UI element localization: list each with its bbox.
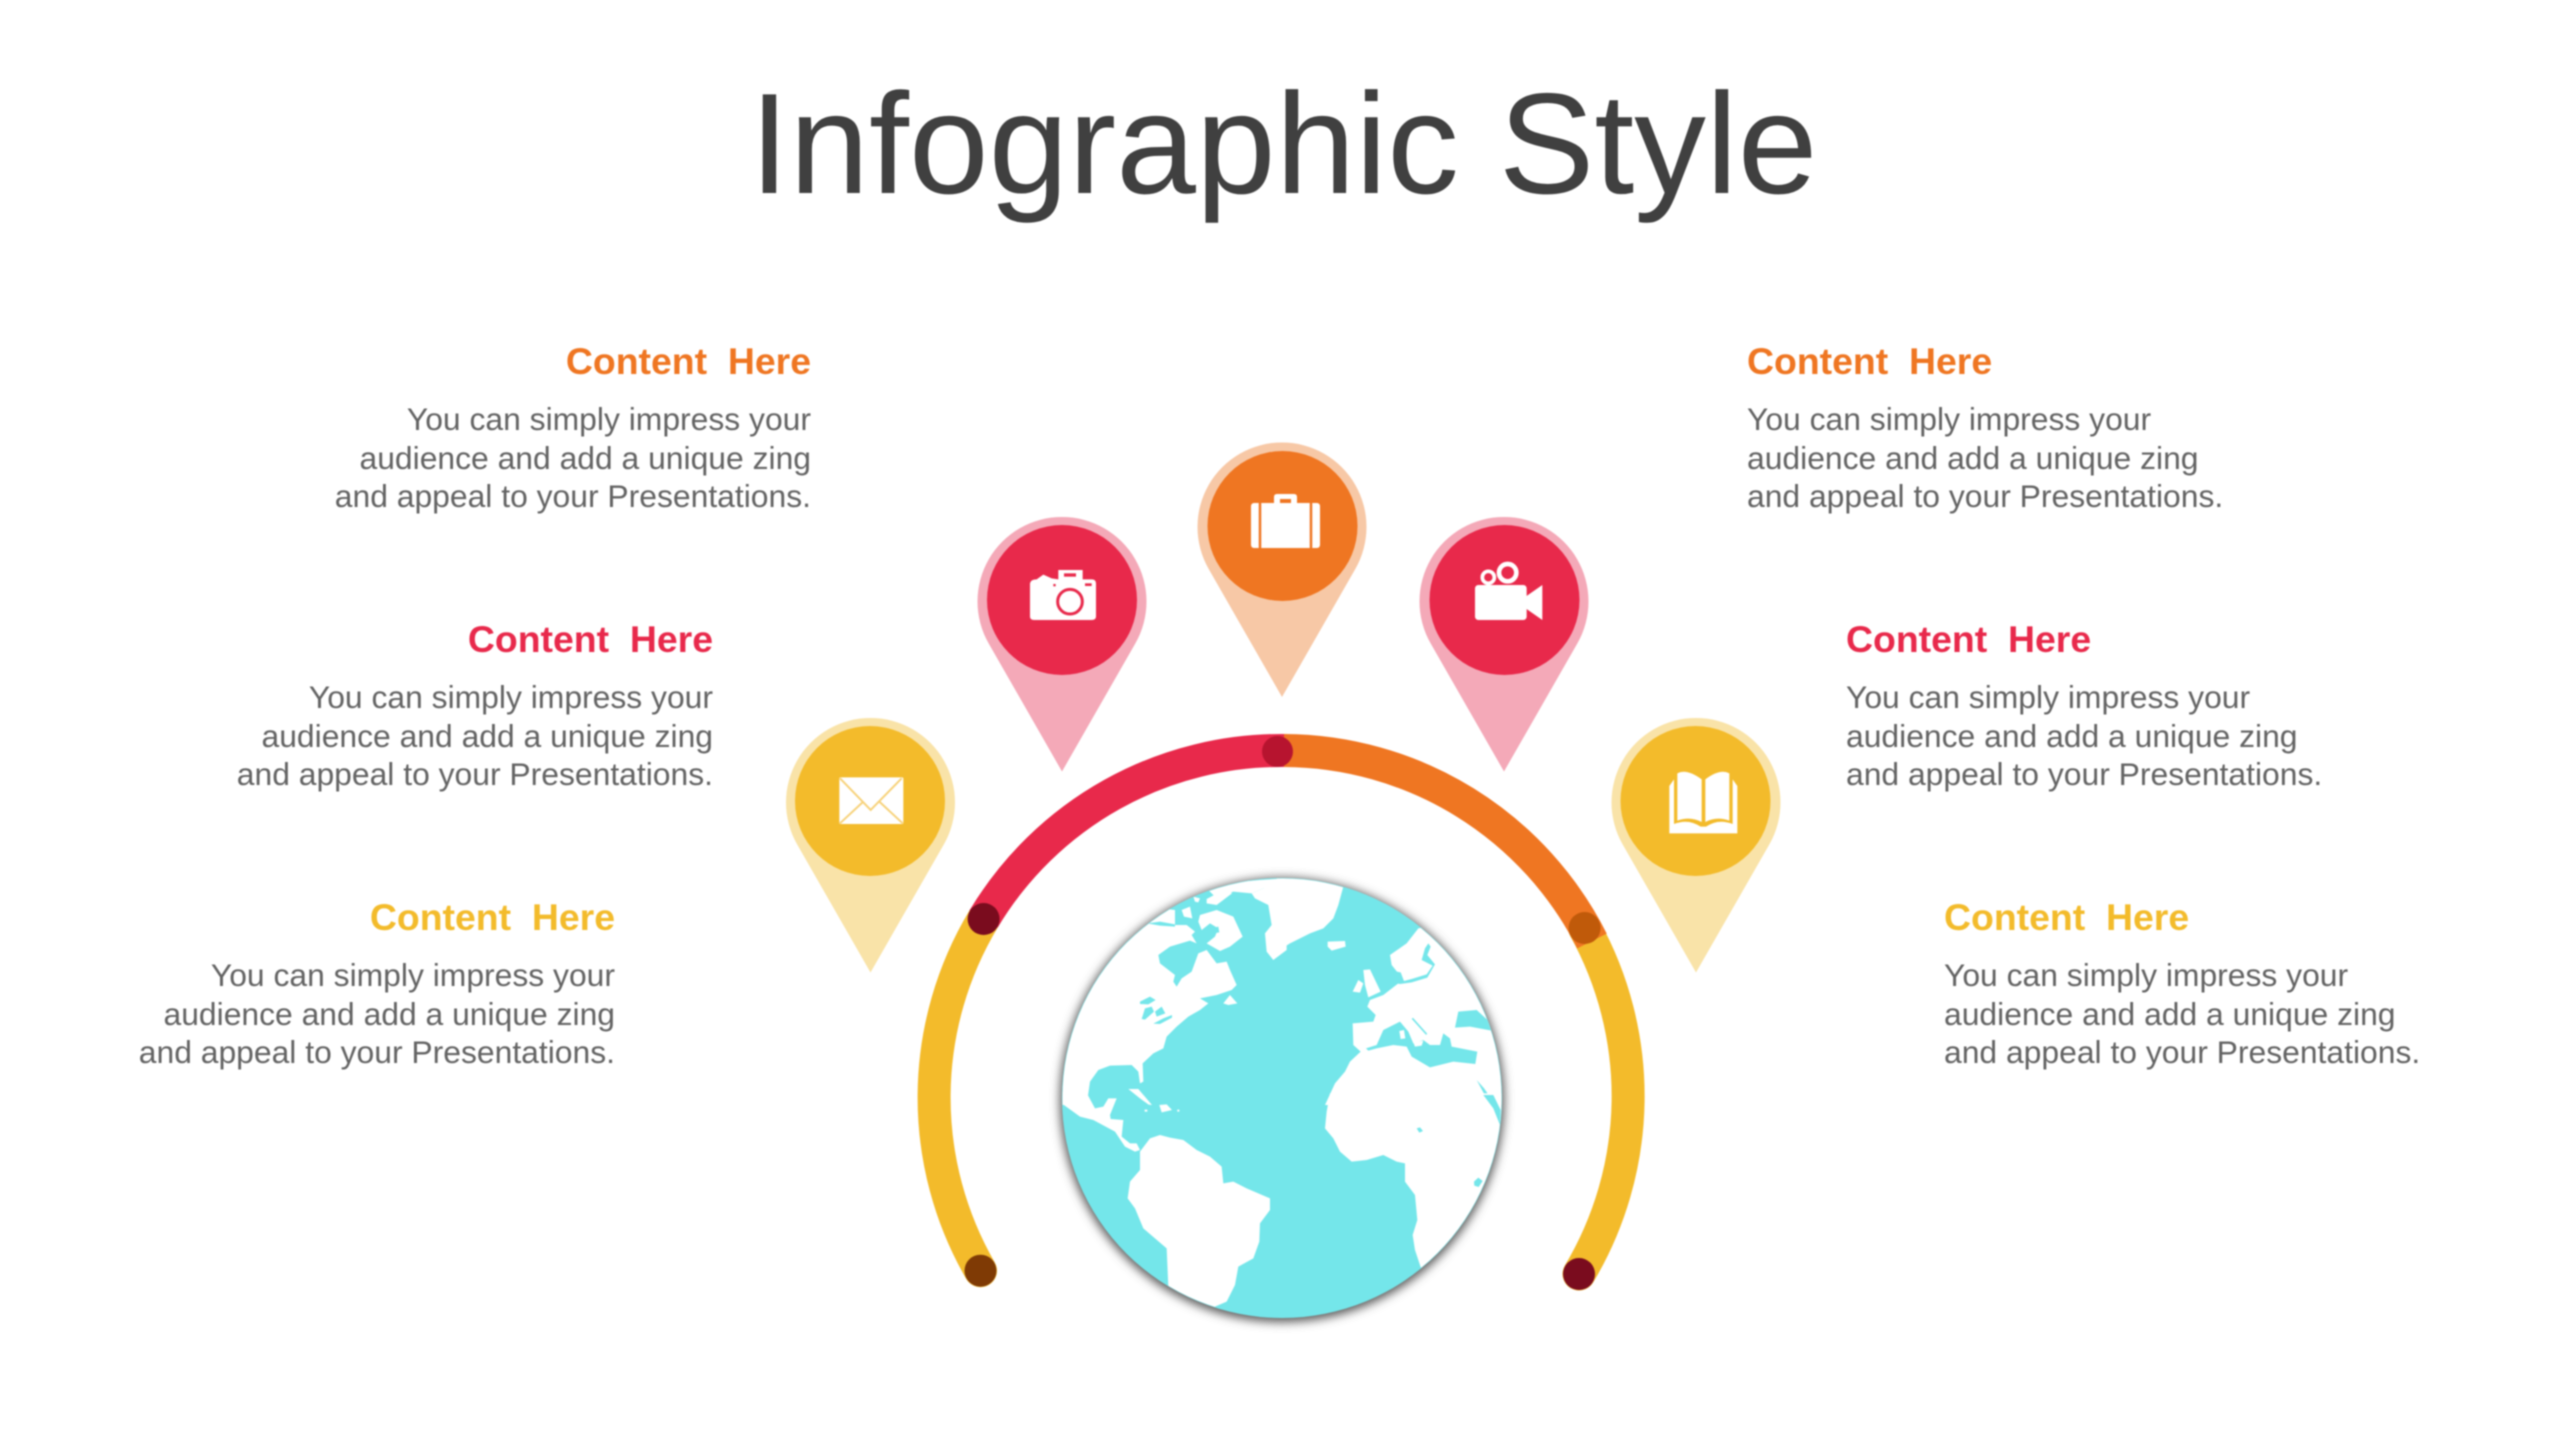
text block: top left: Content Here	[566, 340, 811, 382]
node: bottom left	[964, 1255, 996, 1287]
pin: mail	[786, 718, 955, 972]
icon: open book	[1669, 772, 1737, 833]
title: Infographic Style	[750, 64, 1817, 224]
text block: top left	[335, 340, 811, 514]
pin: camera	[978, 517, 1146, 772]
icon: briefcase	[1251, 494, 1320, 548]
text block: middle right: audience and add a unique zing	[1846, 718, 2298, 754]
text block: bottom left: You can simply impress your	[211, 957, 615, 993]
icon: video camera	[1475, 564, 1542, 620]
land: north america and arctic	[1060, 878, 1287, 1105]
text block: bottom left: Content Here	[370, 896, 615, 938]
text block: top right	[1747, 340, 2223, 514]
text block: top right: and appeal to your Presentations.	[1747, 478, 2223, 514]
text block: middle left	[237, 618, 713, 792]
text block: top left: and appeal to your Presentations.	[335, 478, 811, 514]
text block: middle right: You can simply impress your	[1846, 679, 2251, 715]
arc segment: red	[984, 750, 1286, 919]
land: southern africa	[1324, 1092, 1502, 1268]
node: right	[1569, 912, 1601, 944]
text block: top left: You can simply impress your	[407, 401, 811, 437]
text block: bottom right: Content Here	[1944, 896, 2189, 938]
text block: middle right: and appeal to your Presentations.	[1846, 756, 2322, 792]
arc segment: right yellow	[1579, 928, 1628, 1274]
arc gauge	[934, 736, 1628, 1290]
text block: middle right: Content Here	[1846, 618, 2091, 660]
node: left	[968, 903, 1000, 935]
text block: middle right	[1846, 618, 2322, 792]
land: greenland east, europe, north africa	[1277, 875, 1520, 1105]
icon: envelope	[839, 777, 903, 824]
text block: bottom right: audience and add a unique zing	[1944, 996, 2396, 1032]
icon: camera	[1030, 570, 1096, 620]
arc segment: left yellow	[934, 919, 984, 1271]
land: central and south america	[1057, 1089, 1270, 1313]
text block: bottom right	[1944, 896, 2420, 1070]
text block: bottom left: audience and add a unique zing	[163, 996, 615, 1032]
text block: bottom right: You can simply impress your	[1944, 957, 2349, 993]
text block: middle left: audience and add a unique zing	[261, 718, 713, 754]
text block: top right: Content Here	[1747, 340, 1992, 382]
text block: top left: audience and add a unique zing	[359, 440, 811, 476]
text block: middle left: and appeal to your Presentations.	[237, 756, 713, 792]
text block: bottom right: and appeal to your Presentations.	[1944, 1034, 2420, 1070]
text block: middle left: Content Here	[468, 618, 713, 660]
node: top	[1262, 736, 1293, 767]
globe	[1057, 875, 1520, 1322]
text block: middle left: You can simply impress your	[309, 679, 713, 715]
text block: top right: You can simply impress your	[1747, 401, 2152, 437]
pin: briefcase	[1198, 442, 1366, 697]
node: bottom right	[1563, 1258, 1595, 1290]
text block: top right: audience and add a unique zing	[1747, 440, 2199, 476]
text block: bottom left	[139, 896, 615, 1070]
pin: book	[1612, 718, 1780, 972]
text block: bottom left: and appeal to your Presentations.	[139, 1034, 615, 1070]
pin: video camera	[1420, 517, 1588, 772]
arc segment: orange	[1284, 750, 1592, 941]
